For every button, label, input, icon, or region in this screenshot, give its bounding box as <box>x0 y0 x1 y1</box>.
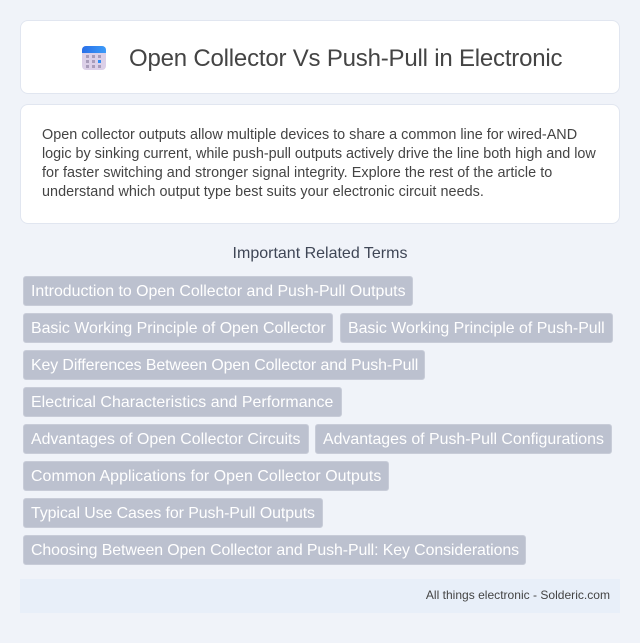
tag list: Basic Working Principle of Open Collector <box>31 320 326 337</box>
intro text <box>42 127 596 200</box>
title: Open Collector Vs Push-Pull in Electronic <box>129 45 562 72</box>
tag list: Introduction to Open Collector and Push-Pull Outputs <box>31 283 406 300</box>
tag list: Advantages of Open Collector Circuits <box>31 431 300 448</box>
tag list: Typical Use Cases for Push-Pull Outputs <box>31 505 315 522</box>
intro text: Open collector outputs allow multiple devices to share a common line for wired-AND <box>42 127 577 143</box>
heading: important related terms: Important Related Terms <box>233 245 407 262</box>
tag list: Key Differences Between Open Collector and Push-Pull <box>31 357 418 374</box>
tag list <box>23 276 613 565</box>
icon: calendar <box>82 46 106 70</box>
header panel <box>20 20 620 94</box>
tag list: Choosing Between Open Collector and Push-Pull: Key Considerations <box>31 542 519 559</box>
footer text: All things electronic - Solderic.com <box>426 588 610 602</box>
intro text: logic by sinking current, while push-pull outputs actively drive the line both high and low <box>42 146 596 162</box>
tag list: Advantages of Push-Pull Configurations <box>323 431 604 448</box>
intro text: for faster switching and stronger signal integrity. Explore the rest of the article to <box>42 165 552 181</box>
panel: intro paragraph <box>20 104 620 224</box>
tag list: Common Applications for Open Collector Outputs <box>31 468 381 485</box>
tag list: Electrical Characteristics and Performance <box>31 394 333 411</box>
tag list: Basic Working Principle of Push-Pull <box>348 320 605 337</box>
footer bar <box>20 579 620 613</box>
intro text: understand which output type best suits your electronic circuit needs. <box>42 184 484 200</box>
